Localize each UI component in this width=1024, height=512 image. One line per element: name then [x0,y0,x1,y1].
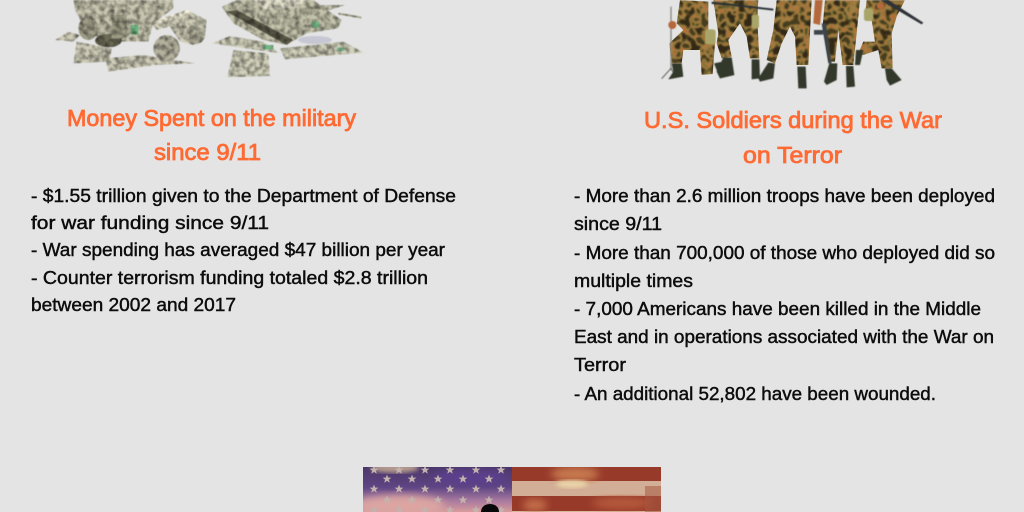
heading: money spent: Money Spent on the military [67,105,356,131]
dollar bills under the tank [212,36,364,77]
text block: money facts: - $1.55 trillion given to the Department of Defense [31,185,456,206]
flag stripes [512,467,661,512]
text block: soldier facts: - More than 2.6 million troops have been deployed [574,185,995,206]
image: American flag with silhouette [363,467,661,512]
text block: money facts: between 2002 and 2017 [31,294,236,315]
flag star field [363,467,512,512]
text block: soldier facts: East and in operations associated with the War on [574,326,994,347]
tank hull, turret and gun [222,0,362,51]
armored vehicle [73,0,207,62]
heading: U.S. soldiers: U.S. Soldiers during the War [644,107,942,133]
text block: soldier facts: since 9/11 [574,213,662,234]
text block: soldier facts: Terror [574,354,626,375]
image: five soldiers in camouflage [662,0,923,88]
text block: soldier facts: - 7,000 Americans have been killed in the Middle [574,298,981,319]
tank shadow [298,36,332,44]
text block: money facts: - War spending has averaged $47 billion per year [31,239,445,260]
heading: U.S. soldiers: on Terror [743,142,842,168]
text block: soldier facts [574,185,995,404]
text block: money facts [31,185,456,315]
soldier uniforms with camouflage pattern [669,0,905,75]
heading: U.S. soldiers [644,107,942,168]
heading: money spent [67,105,356,165]
text block: money facts: for war funding since 9/11 [31,212,269,233]
text block: soldier facts: - An additional 52,802 have been wounded. [574,383,936,404]
text block: money facts: - Counter terrorism funding totaled $2.8 trillion [31,267,428,288]
image: tanks made of dollar bills [55,0,364,77]
dollar bills under the armored vehicle [55,32,195,72]
soldier boots, rifles and gear [662,0,923,88]
heading: money spent: since 9/11 [154,139,261,165]
text block: soldier facts: multiple times [574,270,693,291]
silhouette head [481,504,499,512]
text block: soldier facts: - More than 700,000 of those who deployed did so [574,242,995,263]
